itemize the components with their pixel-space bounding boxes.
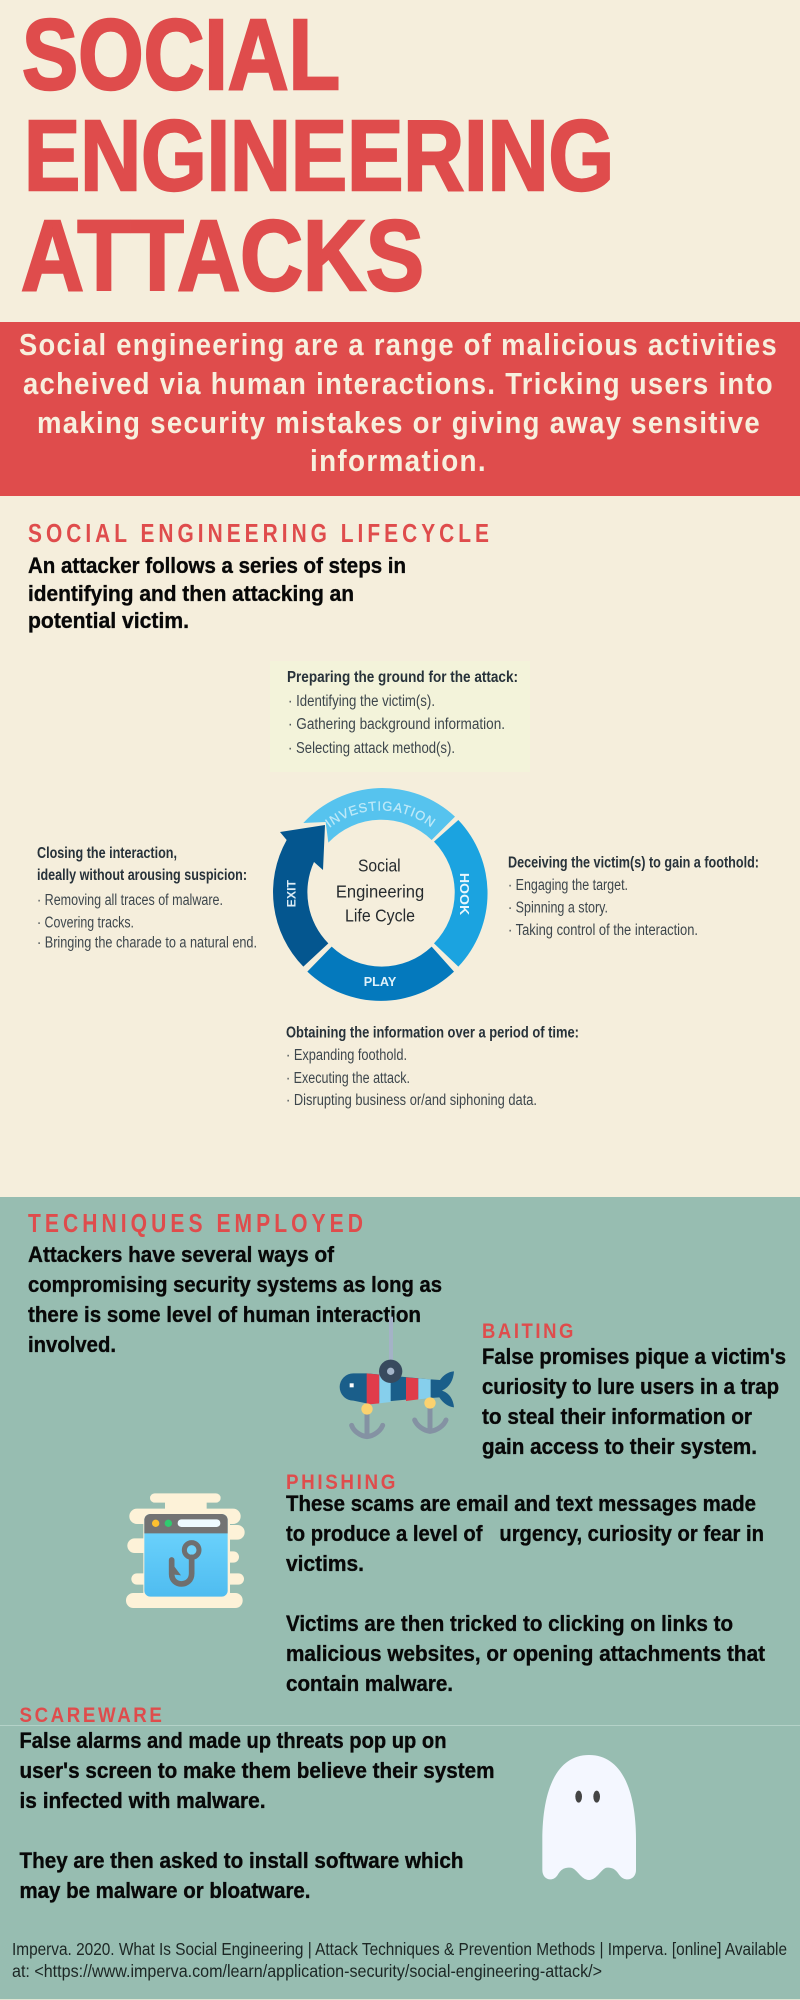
- panel: exit step: ideally without arousing suspicion:: [37, 867, 247, 884]
- phishing section: victims.: [286, 1551, 364, 1576]
- phishing section: Victims are then tricked to clicking on links to: [286, 1611, 733, 1636]
- ring centre text: [336, 856, 424, 926]
- phishing section: PHISHING: [286, 1470, 398, 1494]
- panel: investigation step: [270, 661, 530, 772]
- label: hook: HOOK: [457, 873, 471, 916]
- ring centre text: Social: [358, 856, 401, 876]
- label: investigation: INVESTIGATION: [324, 801, 436, 828]
- techniques intro text: there is some level of human interaction: [28, 1302, 421, 1327]
- title: [21, 0, 614, 312]
- phishing section: These scams are email and text messages made: [286, 1491, 756, 1516]
- techniques intro text: compromising security systems as long as: [28, 1272, 442, 1297]
- title: ENGINEERING: [24, 100, 614, 212]
- panel: play step: Obtaining the information over a period of time:: [286, 1024, 579, 1042]
- panel: exit step: [37, 845, 257, 952]
- intro banner: information.: [310, 443, 487, 478]
- techniques intro text: involved.: [28, 1332, 116, 1357]
- scareware section: user's screen to make them believe their system: [20, 1758, 494, 1783]
- segment: investigation: [303, 788, 455, 843]
- scareware section: is infected with malware.: [20, 1788, 266, 1813]
- icon: fishing lure: [340, 1317, 454, 1437]
- baiting section: BAITING: [482, 1319, 576, 1343]
- segment: play: [307, 947, 454, 1001]
- panel: investigation step: · Identifying the victim(s).: [288, 693, 435, 710]
- heading: techniques employed: TECHNIQUES EMPLOYED: [28, 1208, 367, 1238]
- icon: ghost: [542, 1755, 636, 1880]
- phishing section: contain malware.: [286, 1671, 453, 1696]
- panel: exit step: · Removing all traces of malware.: [37, 892, 223, 909]
- scareware section: SCAREWARE: [20, 1703, 164, 1727]
- phishing section: malicious websites, or opening attachments that: [286, 1641, 765, 1666]
- baiting section: to steal their information or: [482, 1404, 752, 1429]
- panel: play step: · Expanding foothold.: [286, 1047, 407, 1064]
- scareware section: [20, 1703, 494, 1903]
- title: SOCIAL: [22, 0, 340, 111]
- panel: techniques background: [0, 1197, 800, 2000]
- panel: play step: · Executing the attack.: [286, 1070, 410, 1087]
- panel: exit step: · Bringing the charade to a natural end.: [37, 934, 257, 952]
- panel: investigation step: · Selecting attack method(s).: [288, 740, 455, 757]
- label: play: PLAY: [364, 975, 397, 989]
- scareware section: They are then asked to install software which: [20, 1848, 464, 1873]
- techniques intro text: Attackers have several ways of: [28, 1242, 334, 1267]
- baiting section: [482, 1319, 786, 1459]
- citation: [12, 1939, 787, 1981]
- panel: hook step: [508, 854, 759, 939]
- intro banner: [0, 322, 800, 496]
- icon: phishing browser window: [126, 1493, 245, 1608]
- panel: hook step: · Engaging the target.: [508, 877, 628, 894]
- segment: hook: [434, 820, 488, 967]
- panel: exit step: Closing the interaction,: [37, 845, 177, 862]
- lifecycle intro text: identifying and then attacking an: [28, 581, 354, 606]
- ring centre text: Life Cycle: [345, 906, 415, 926]
- scareware section: may be malware or bloatware.: [20, 1878, 310, 1903]
- panel: investigation step: · Gathering background information.: [288, 716, 505, 733]
- citation: at: <https://www.imperva.com/learn/application-security/social-engineering-attack/>: [12, 1961, 602, 1981]
- segment: exit arrow: [273, 825, 328, 967]
- phishing section: [286, 1470, 765, 1696]
- chart: life cycle ring: [273, 788, 488, 1001]
- techniques intro text: [28, 1242, 442, 1357]
- panel: exit step: · Covering tracks.: [37, 914, 134, 932]
- panel: hook step: · Spinning a story.: [508, 900, 608, 916]
- baiting section: gain access to their system.: [482, 1434, 757, 1459]
- heading: social engineering lifecycle: SOCIAL ENGINEERING LIFECYCLE: [28, 518, 493, 548]
- panel: hook step: · Taking control of the interaction.: [508, 922, 698, 939]
- lifecycle intro text: potential victim.: [28, 608, 189, 633]
- lifecycle intro text: An attacker follows a series of steps in: [28, 553, 406, 578]
- panel: investigation step: Preparing the ground for the attack:: [287, 669, 518, 686]
- lifecycle intro text: [28, 553, 406, 633]
- ring centre text: Engineering: [336, 881, 424, 901]
- scareware section: False alarms and made up threats pop up on: [20, 1728, 446, 1753]
- title: ATTACKS: [21, 200, 424, 312]
- label: exit: EXIT: [285, 879, 299, 907]
- panel: play step: [286, 1024, 579, 1109]
- panel: play step: · Disrupting business or/and siphoning data.: [286, 1092, 537, 1109]
